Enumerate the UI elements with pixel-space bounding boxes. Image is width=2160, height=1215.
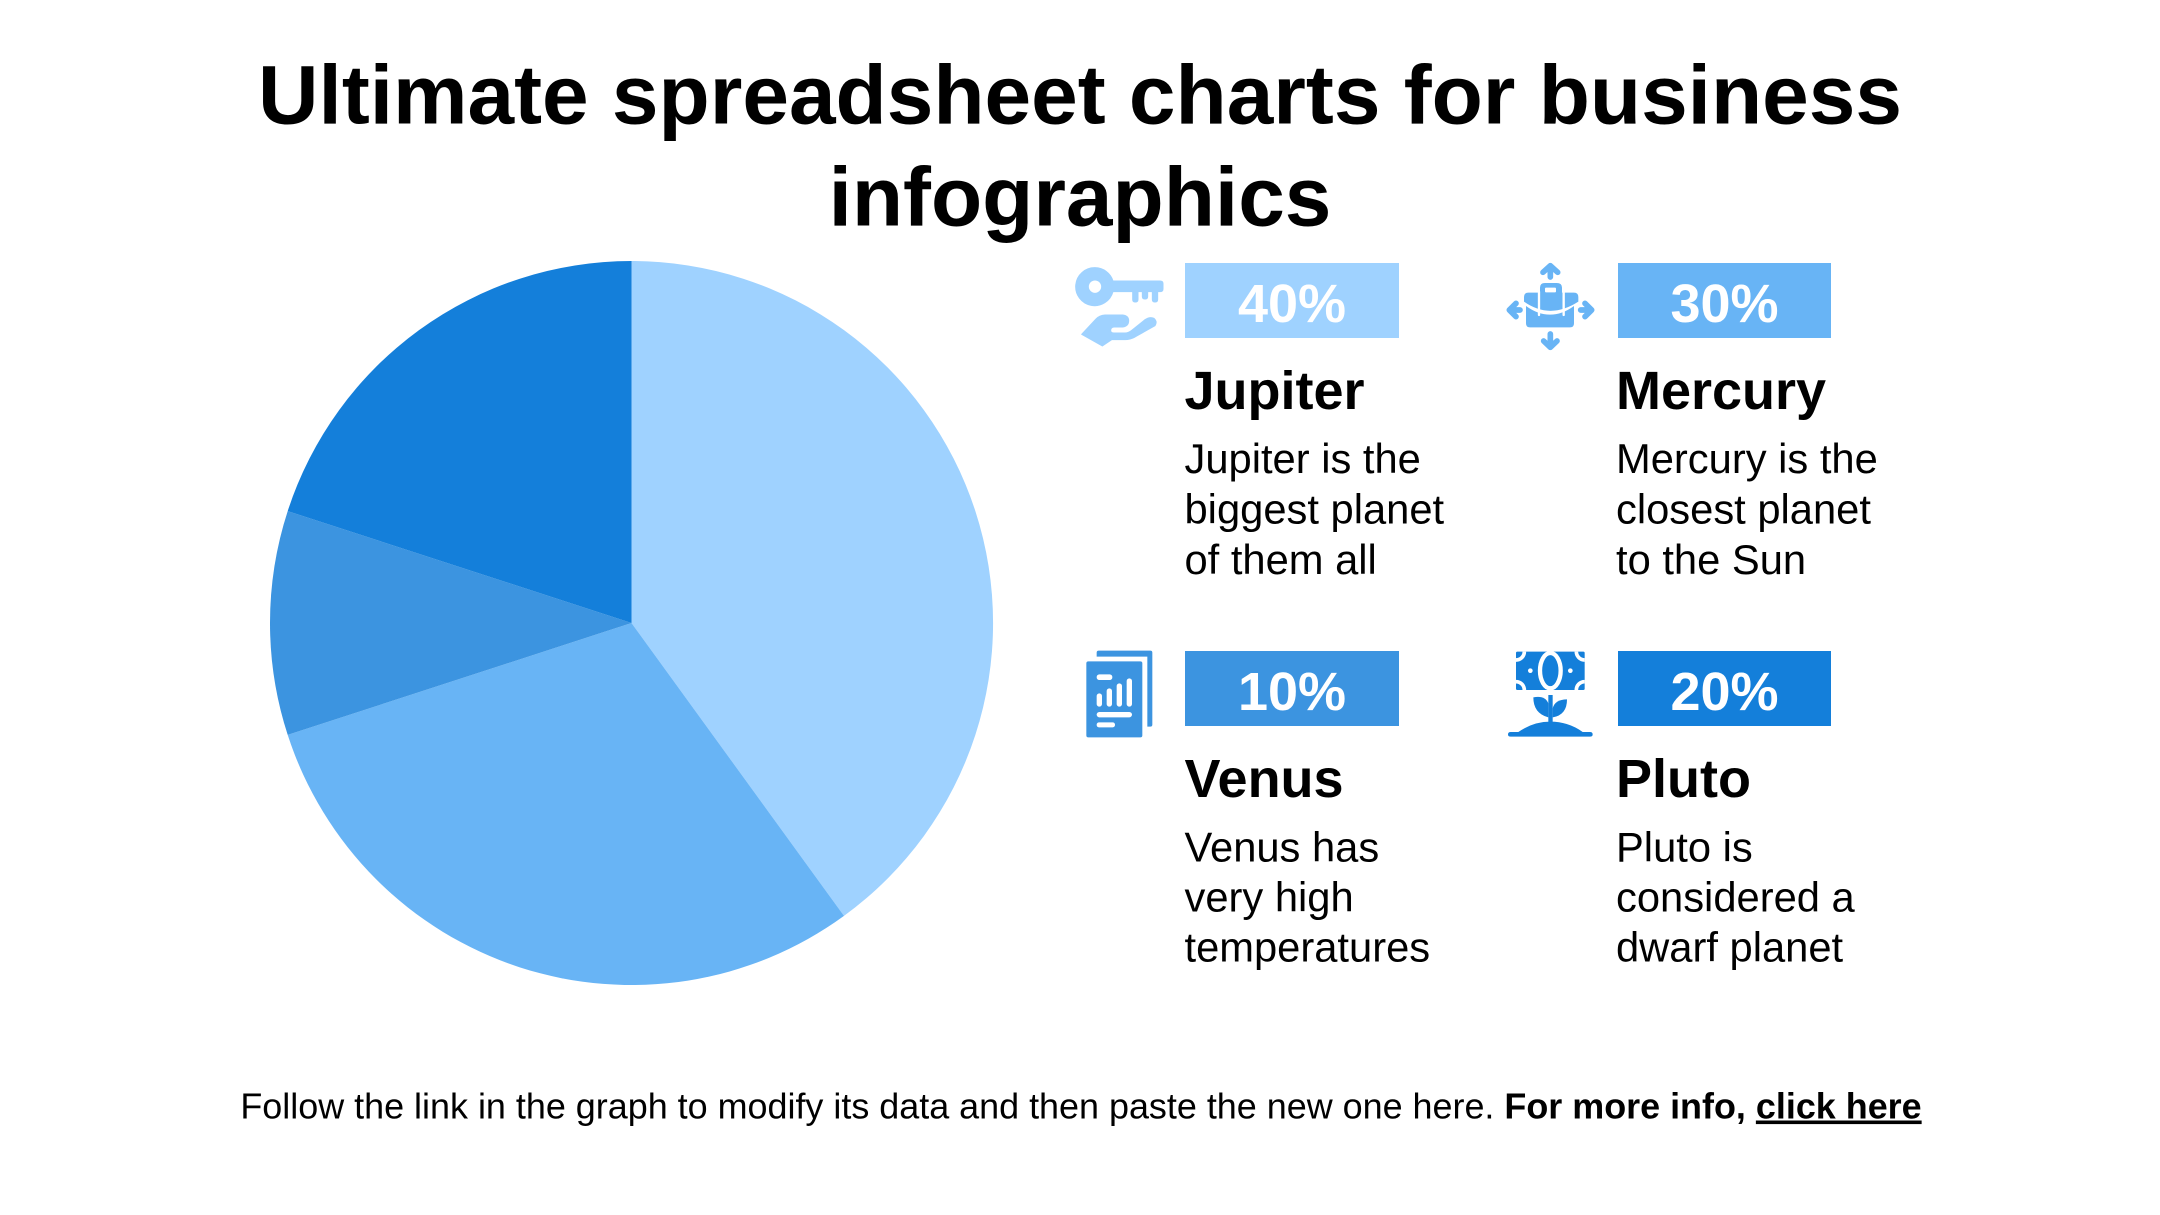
icon: money plant <box>1508 652 1593 737</box>
icon: key and hand <box>1076 268 1163 346</box>
heading: Pluto <box>1616 749 1751 809</box>
panel: Mercury <box>1509 263 1878 583</box>
percentage badge: 30% <box>1670 274 1779 334</box>
description: temperatures <box>1184 924 1430 970</box>
heading: Jupiter <box>1184 361 1365 421</box>
description <box>1616 824 1856 970</box>
title <box>258 48 1902 244</box>
description: very high <box>1184 874 1354 920</box>
description: Pluto is <box>1616 824 1753 870</box>
icon: report documents <box>1086 651 1152 737</box>
panel: Venus <box>1086 651 1430 970</box>
percentage badge <box>1618 651 1831 726</box>
pie chart <box>270 261 993 985</box>
heading: Mercury <box>1616 361 1826 421</box>
description: considered a <box>1616 874 1856 920</box>
percentage badge: 10% <box>1238 662 1346 722</box>
panel: Jupiter <box>1076 263 1445 583</box>
description: biggest planet <box>1184 486 1445 532</box>
description <box>1184 435 1445 583</box>
description: to the Sun <box>1616 536 1806 583</box>
icon: briefcase with arrows <box>1509 266 1592 347</box>
title: infographics <box>829 150 1331 244</box>
description: closest planet <box>1616 486 1871 532</box>
description: Venus has <box>1184 824 1379 870</box>
percentage badge: 40% <box>1238 274 1346 334</box>
percentage badge <box>1185 651 1399 726</box>
description: of them all <box>1184 536 1377 583</box>
percentage badge: 20% <box>1670 662 1779 722</box>
panel: Pluto <box>1508 651 1856 970</box>
description: Jupiter is the <box>1184 435 1421 482</box>
footer note: Follow the link in the graph to modify its data and then paste the new one here. For more info, click here <box>240 1086 1922 1126</box>
title: Ultimate spreadsheet charts for business <box>258 48 1902 142</box>
description: Mercury is the <box>1616 435 1878 482</box>
heading: Venus <box>1184 749 1344 809</box>
percentage badge <box>1185 263 1399 338</box>
description: dwarf planet <box>1616 924 1844 970</box>
description <box>1184 824 1430 970</box>
percentage badge <box>1618 263 1831 338</box>
description <box>1616 435 1878 583</box>
